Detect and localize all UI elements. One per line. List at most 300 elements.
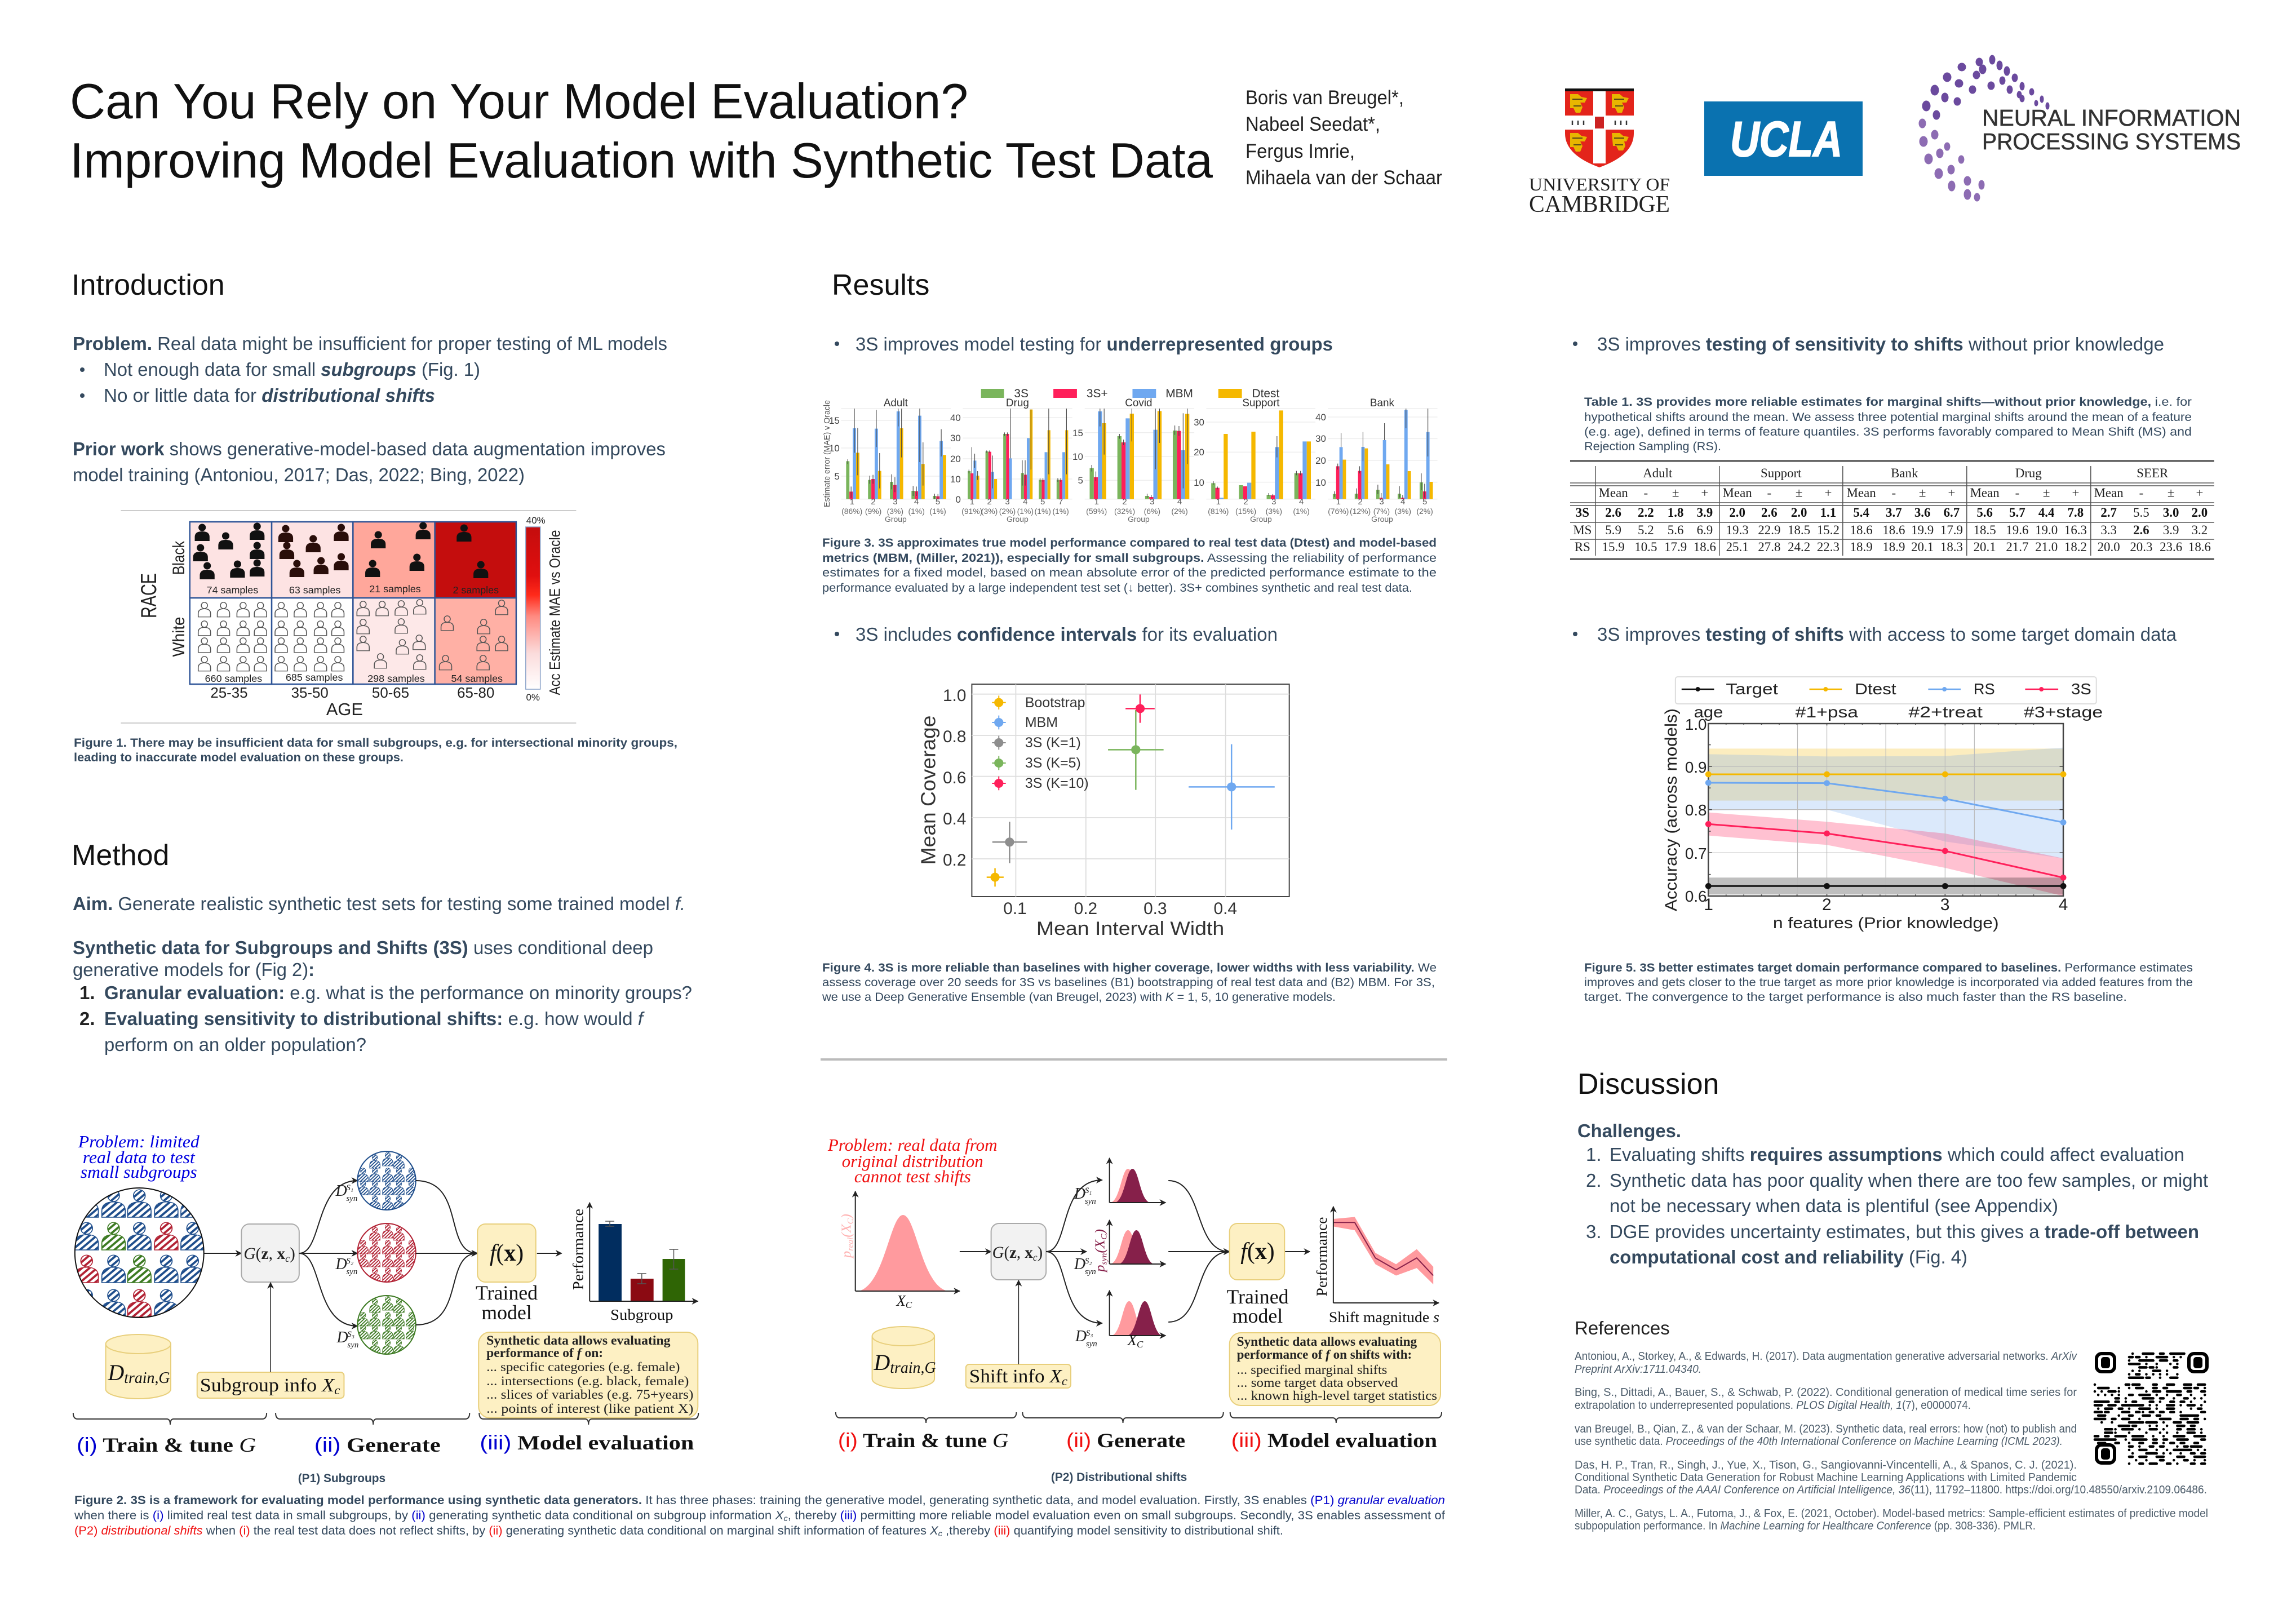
synthetic set labels: p xyxy=(1093,1265,1108,1272)
table header: Mean xyxy=(1970,486,2000,500)
axis ticks and titles xyxy=(917,686,1237,939)
chart: real distribution: real xyxy=(846,1238,856,1251)
point: Bootstrap xyxy=(987,868,1004,886)
phase braces xyxy=(73,1413,698,1425)
table header: + xyxy=(1824,486,1832,500)
caption: figure 2: ,thereby xyxy=(942,1524,991,1537)
table header: ± xyxy=(2168,486,2174,500)
icon: training data cylinder: D xyxy=(874,1350,890,1375)
x ticks: 3 xyxy=(1379,497,1384,507)
table row: RS: 21.0 xyxy=(2035,540,2058,554)
group shares: Group xyxy=(1007,515,1029,524)
sample count labels: 660 samples xyxy=(205,673,262,684)
text block: reference list: Preprint ArXiv:1711.04340. xyxy=(1575,1363,1701,1376)
text block: prior work: Prior work shows generative-model-based data augmentation improves xyxy=(73,438,666,459)
subgroup info box: c xyxy=(334,1383,340,1397)
table header: + xyxy=(2196,486,2203,500)
group shares: Group xyxy=(1250,515,1272,524)
chart legend: MBM xyxy=(1165,387,1193,400)
title: Improving Model Evaluation with Synthetic Test Data xyxy=(70,132,1213,188)
table row: 3S: 2.6 xyxy=(1605,505,1621,520)
group shares: (6%) xyxy=(1144,507,1160,516)
group shares: Group xyxy=(1128,515,1150,524)
phase labels: (ii) Generate xyxy=(314,1433,441,1456)
phase labels: (i) Train & tune G xyxy=(838,1429,1009,1452)
heading: Discussion: Discussion xyxy=(1577,1068,1719,1101)
caption: figure 3: estimates for a fixed model, based on mean absolute error of the predicted performance estimate to the xyxy=(822,566,1437,579)
axis labels: White xyxy=(170,617,188,657)
synthetic set labels: D xyxy=(335,1256,347,1273)
evaluation note box: performance of f on: xyxy=(486,1346,603,1360)
caption: figure 3: performance evaluated by a large independent test set (↓ better). 3S+ combines synthetic and real test data. xyxy=(822,582,1412,595)
chart legend: RS xyxy=(1974,680,1995,698)
line chart: performance vs shift magnitude: Performance xyxy=(1314,1217,1330,1297)
y ticks: 0 xyxy=(955,494,961,505)
chart: shift S2 xyxy=(1110,1220,1165,1264)
point: 3S K=5 xyxy=(1108,710,1164,790)
table header: Drug xyxy=(2015,466,2042,480)
chart legend: Target xyxy=(1726,680,1778,698)
y ticks: 30 xyxy=(1315,433,1326,444)
table header: Mean xyxy=(1847,486,1876,500)
problem note: Problem: real data from xyxy=(827,1135,998,1155)
plot area xyxy=(1705,724,2067,896)
text block: reference list: Antoniou, A., Storkey, A., & Edwards, H. (2017). Data augmentation generative adversarial networks. ArXiv xyxy=(1575,1350,2077,1363)
table row: MS: 19.0 xyxy=(2035,523,2058,537)
phase labels xyxy=(838,1429,1437,1452)
colour bar legend: 40% xyxy=(526,515,546,526)
table header: Support xyxy=(1761,466,1802,480)
y ticks: 10 xyxy=(1315,477,1326,488)
table row: 3S: 3.7 xyxy=(1886,505,1902,520)
problem note: cannot test shifts xyxy=(854,1167,971,1186)
title: Can You Rely on Your Model Evaluation? xyxy=(70,73,968,129)
icons: white subgroup people xyxy=(198,600,508,671)
table row: 3S: 3.0 xyxy=(2163,505,2179,520)
chart: real distribution: (X xyxy=(840,1223,854,1238)
arrow: real data to generator xyxy=(204,1253,241,1254)
bullet: underrepresented groups: 3S improves model testing for underrepresented groups xyxy=(856,334,1333,354)
axis ticks and titles: 0.9 xyxy=(1685,759,1707,776)
x ticks: 3 xyxy=(1271,497,1276,507)
caption: table 1: hypothetical shifts around the mean. We assess three potential marginal shifts around the mean of a feature xyxy=(1584,411,2192,424)
icons: black subgroup people xyxy=(193,522,488,579)
text block: challenges: DGE provides uncertainty estimates, but this gives a trade-off between xyxy=(1610,1221,2199,1242)
x ticks: 4 xyxy=(914,497,919,507)
icon: training data cylinder: train,G xyxy=(890,1359,936,1377)
group shares: Group xyxy=(885,515,907,524)
text block: 3S description: Evaluating sensitivity to distributional shifts: e.g. how would f xyxy=(104,1008,645,1029)
subplot titles: Drug xyxy=(1006,397,1029,409)
y ticks: 15 xyxy=(829,415,840,426)
table row: 3S: 5.7 xyxy=(2009,505,2025,520)
table row: MS: 3.2 xyxy=(2192,523,2208,537)
table row: MS: 19.9 xyxy=(1911,523,1934,537)
table row: 3S: 2.0 xyxy=(1791,505,1807,520)
point: 3S K=1 xyxy=(992,822,1027,863)
synthetic set labels: D xyxy=(1075,1328,1087,1345)
caption: table 1: Rejection Sampling (RS). xyxy=(1584,440,1721,453)
text block: 3S description: Granular evaluation: e.g. what is the performance on minority groups? xyxy=(104,982,692,1003)
feature labels: age xyxy=(1694,703,1723,721)
text block: challenges: Challenges. xyxy=(1577,1120,1681,1141)
synthetic set labels xyxy=(335,1182,358,1350)
group shares: (15%) xyxy=(1235,507,1256,516)
icon: QR code xyxy=(2095,1354,2207,1464)
bullet: confidence intervals: 3S includes confidence intervals for its evaluation xyxy=(856,624,1278,645)
evaluation note box: ... specific categories (e.g. female) xyxy=(486,1360,680,1374)
synthetic set labels xyxy=(1074,1185,1143,1350)
x ticks: 1 xyxy=(1216,497,1221,507)
caption: figure 1: Figure 1. There may be insufficient data for small subgroups, e.g. for intersectional minority groups, xyxy=(74,737,677,750)
x ticks: 4 xyxy=(1023,497,1027,507)
sample count labels: 685 samples xyxy=(286,672,343,683)
subplot titles: Bank xyxy=(1370,397,1395,409)
text block: reference list: subpopulation performance. In Machine Learning for Healthcare Conference (pp. 308-336). PMLR. xyxy=(1575,1520,2036,1532)
line chart: performance vs shift magnitude xyxy=(1314,1207,1439,1325)
x ticks: 1 xyxy=(1336,497,1341,507)
subgroup info box: Subgroup info X xyxy=(200,1375,334,1396)
x ticks: 5 xyxy=(1040,497,1045,507)
trained model box: model xyxy=(1233,1305,1283,1327)
caption: figure 2: c xyxy=(783,1514,788,1523)
heading: Method: Method xyxy=(72,839,169,872)
chart legend xyxy=(1676,677,2096,704)
feature labels xyxy=(1694,703,2103,721)
icon: circle of real people xyxy=(75,1188,205,1318)
group shares: (81%) xyxy=(1208,507,1229,516)
synthetic set labels: X xyxy=(1128,1332,1137,1349)
arrow: model to performance xyxy=(537,1253,561,1254)
generator box: ) xyxy=(1038,1243,1043,1262)
legend labels: 3S (K=5) xyxy=(1025,755,1081,771)
chart: real distribution: C xyxy=(906,1300,912,1310)
axis labels: 35-50 xyxy=(291,685,329,701)
table header: + xyxy=(1701,486,1708,500)
figure 3: bar charts by subgroup xyxy=(822,387,1438,524)
text block: aim: Aim. Generate realistic synthetic test sets for testing some trained model f. xyxy=(73,893,685,914)
table header: + xyxy=(2072,486,2079,500)
trained model box: f(x) xyxy=(1240,1239,1275,1265)
caption: table 1: (e.g. age), defined in terms of feature quantiles. 3S performs favorably compared to Mean Shift (MS) and xyxy=(1584,425,2192,438)
axis ticks and titles: 0.3 xyxy=(1143,899,1167,918)
logo: Neural Information Processing Systems: NEURAL INFORMATION xyxy=(1982,105,2241,131)
legend labels: Bootstrap xyxy=(1025,695,1085,711)
caption: figure 2: (P2) distributional shifts when (i) the real test data does not reflect shifts, by (ii) generating synthetic data conditional on marginal shift information of features X xyxy=(74,1524,938,1537)
icon: training data cylinder xyxy=(106,1334,171,1399)
table row: MS: 6.9 xyxy=(1697,523,1713,537)
synthetic set labels: S₃ xyxy=(1086,1329,1093,1338)
table row: MS: 5.2 xyxy=(1638,523,1654,537)
y ticks: 5 xyxy=(834,471,840,482)
axis labels: AGE xyxy=(326,699,363,719)
group shares: (2%) xyxy=(999,507,1016,516)
series: Target xyxy=(1705,883,2067,889)
text block: reference list: van Breugel, B., Qian, Z., & van der Schaar, M. (2023). Synthetic data, real errors: how (not) to publish and xyxy=(1575,1423,2077,1435)
table row: RS: 20.3 xyxy=(2130,540,2152,554)
group shares: (2%) xyxy=(1416,507,1433,516)
caption: figure 5 xyxy=(1584,961,2193,1004)
subplot titles: Support xyxy=(1242,397,1280,409)
table row: MS: 5.6 xyxy=(1668,523,1683,537)
y ticks: 5 xyxy=(1078,475,1083,486)
trained model box: Trained xyxy=(1226,1285,1289,1308)
x ticks: 2 xyxy=(1243,497,1248,507)
text block: reference list: extrapolation to underrepresented populations. PLOS Digital Health, 1(7), e0000074. xyxy=(1575,1399,1971,1412)
chart: shift S1 xyxy=(1110,1158,1165,1203)
text block: reference list: Bing, S., Dittadi, A., Bauer, S., & Schwab, P. (2022). Conditional generation of medical time series for xyxy=(1575,1386,2077,1399)
table row: 3S: 2.0 xyxy=(2192,505,2208,520)
x ticks: 5 xyxy=(936,497,940,507)
axis ticks and titles: 3 xyxy=(1940,895,1950,914)
phase labels: (i) Train & tune G xyxy=(77,1433,256,1456)
table row: 3S: 3.9 xyxy=(1697,505,1713,520)
synthetic set labels: (X xyxy=(1093,1239,1108,1253)
evaluation note box: ... points of interest (like patient X) xyxy=(486,1402,693,1416)
caption: figure 3: Figure 3. 3S approximates true model performance compared to real test data (Dtest) and model-based xyxy=(822,536,1437,549)
text block: reference list: Data. Proceedings of the AAAI Conference on Artificial Intelligence, 36(11), 11792–11800. https://doi.org/10.48550/arxiv.2109.06486. xyxy=(1575,1484,2207,1496)
legend labels: 3S (K=1) xyxy=(1025,735,1081,751)
caption: figure 2: Figure 2. 3S is a framework for evaluating model performance using synthetic data generators. It has three phases: training the generative model, generating synthetic data, and model evaluation. Firstly, 3S enables (P1) granular evaluation xyxy=(74,1494,1445,1507)
chart legend: Dtest xyxy=(1855,680,1896,698)
x ticks: 5 xyxy=(1422,497,1427,507)
table header: Bank xyxy=(1891,466,1918,480)
figure 5: accuracy vs features line chart xyxy=(1662,677,2103,932)
synthetic set labels: D xyxy=(1074,1256,1085,1273)
caption: figure 4 xyxy=(822,961,1437,1004)
axis ticks and titles: 4 xyxy=(2059,895,2068,914)
feature labels: #2+treat xyxy=(1909,703,1983,721)
synthetic set labels: ) xyxy=(1093,1229,1108,1235)
text block: prior work xyxy=(73,438,666,485)
table row: MS: 3.3 xyxy=(2100,523,2117,537)
chart: real distribution: ) xyxy=(840,1214,854,1220)
text block: problem statement: Not enough data for small subgroups (Fig. 1) xyxy=(104,359,480,380)
sample count labels: 63 samples xyxy=(289,584,340,596)
problem note: small subgroups xyxy=(81,1162,197,1182)
caption: figure 3 xyxy=(822,536,1437,595)
shift info box: c xyxy=(1062,1374,1067,1388)
table row: MS: 18.6 xyxy=(1882,523,1905,537)
table row: 3S: 2.7 xyxy=(2100,505,2117,520)
legend markers xyxy=(992,695,1006,790)
generator box: G(z, x xyxy=(992,1243,1033,1262)
table header: ± xyxy=(1919,486,1926,500)
evaluation note box: Synthetic data allows evaluating xyxy=(486,1333,671,1347)
y ticks xyxy=(829,412,1326,505)
y ticks: 20 xyxy=(1194,447,1204,458)
table row: 3S: 5.4 xyxy=(1853,505,1869,520)
axis ticks and titles: 0.6 xyxy=(943,769,966,787)
group shares: (91%) xyxy=(961,507,982,516)
arrows: synthetic sets to model xyxy=(416,1181,477,1325)
shift info box: Shift info X xyxy=(969,1366,1061,1387)
group shares: (1%) xyxy=(1034,507,1051,516)
caption: figure 5: target. The convergence to the target performance is also much faster than the RS baseline. xyxy=(1584,991,2127,1004)
text block: challenges: 1. xyxy=(1586,1144,1602,1165)
sample count labels: 21 samples xyxy=(369,583,421,595)
text block: 3S description: generative models for (Fig 2): xyxy=(73,959,314,980)
chart legend: 3S xyxy=(1014,387,1029,400)
table header: - xyxy=(2015,486,2019,500)
table 1: marginal shift results xyxy=(1570,461,2214,559)
synthetic set labels: S₁ xyxy=(346,1183,353,1192)
point: MBM xyxy=(1189,744,1275,830)
phase labels xyxy=(77,1431,694,1456)
table row: 3S: 5.6 xyxy=(1976,505,1993,520)
caption: figure 4: we use a Deep Generative Ensemble (van Breugel, 2023) with K = 1, 5, 10 generative models. xyxy=(822,991,1336,1004)
evaluation note box: ... some target data observed xyxy=(1237,1376,1398,1390)
authors: Fergus Imrie, xyxy=(1245,140,1355,162)
arrows: generator to shifted distributions xyxy=(1046,1180,1102,1323)
evaluation note box: Synthetic data allows evaluating xyxy=(1237,1334,1417,1349)
table row: RS: 20.0 xyxy=(2098,540,2120,554)
table header: - xyxy=(1892,486,1896,500)
text block: challenges: not be necessary when data is plentiful (see Appendix) xyxy=(1610,1195,2058,1216)
synthetic set labels: C xyxy=(1100,1233,1109,1240)
table row: RS: 10.5 xyxy=(1634,540,1657,554)
table row: MS: 3.9 xyxy=(2163,523,2179,537)
chart: real distribution: p xyxy=(840,1251,854,1258)
sample count labels: 74 samples xyxy=(207,584,258,596)
chart legend xyxy=(981,387,1279,400)
caption: table 1: Table 1. 3S provides more reliable estimates for marginal shifts—without prior knowledge, i.e. for xyxy=(1584,396,2192,409)
synthetic set labels: syn xyxy=(346,1267,357,1276)
synthetic set labels: D xyxy=(335,1182,347,1200)
group shares: (2%) xyxy=(1171,507,1188,516)
chart legend: 3S xyxy=(2071,680,2091,698)
evaluation note box: ... known high-level target statistics xyxy=(1237,1389,1437,1403)
table row: 3S xyxy=(1576,505,2208,520)
group shares: (76%) xyxy=(1328,507,1349,516)
caption: figure 2 xyxy=(74,1494,1445,1538)
caption: figure 2: c xyxy=(938,1529,942,1538)
icon: training data cylinder xyxy=(872,1327,936,1389)
table header: - xyxy=(1767,486,1771,500)
table row: MS: 22.9 xyxy=(1758,523,1780,537)
table row: MS: 17.9 xyxy=(1940,523,1963,537)
x ticks: 2 xyxy=(1358,497,1363,507)
table row: 3S: 2.6 xyxy=(1761,505,1778,520)
authors: Boris van Breugel*, xyxy=(1245,87,1404,109)
axis labels: Black xyxy=(170,541,188,575)
authors xyxy=(1245,87,1442,189)
table row: MS: MS xyxy=(1573,523,1592,537)
synthetic set labels: D xyxy=(1074,1185,1085,1203)
chart: shift S3 xyxy=(1110,1291,1165,1336)
authors: Nabeel Seedat*, xyxy=(1245,113,1380,135)
heatmap cells xyxy=(190,522,516,684)
y ticks: 10 xyxy=(829,443,840,454)
caption: figure 2: , thereby xyxy=(788,1509,837,1522)
table row: RS: 17.9 xyxy=(1664,540,1687,554)
sample count labels xyxy=(205,583,503,684)
arrows: distributions to model xyxy=(1168,1181,1230,1322)
chart legend: Dtest xyxy=(1252,387,1279,400)
evaluation note box: performance of f on shifts with: xyxy=(1237,1347,1412,1362)
table row: RS: 22.3 xyxy=(1817,540,1840,554)
heading: Results: Results xyxy=(832,269,929,301)
table row: MS: 19.6 xyxy=(2006,523,2028,537)
table row: 3S: 3.6 xyxy=(1914,505,1930,520)
problem note: real data to test xyxy=(83,1147,196,1167)
panel label P1: (P1) Subgroups xyxy=(298,1472,385,1485)
authors: Mihaela van der Schaar xyxy=(1245,167,1442,189)
bars xyxy=(841,409,1438,499)
evaluation note box xyxy=(478,1332,698,1418)
icon: synthetic subgroup S1 xyxy=(357,1151,416,1210)
caption: figure 4: Figure 4. 3S is more reliable than baselines with higher coverage, lower widths with less variability. We xyxy=(822,961,1437,974)
sample count labels: 298 samples xyxy=(367,673,425,684)
text block: problem statement: No or little data for distributional shifts xyxy=(104,385,435,406)
caption: figure 5: improves and gets closer to the true target as more prior knowledge is incorporated via added features from the xyxy=(1584,976,2193,989)
panel label P2: (P2) Distributional shifts xyxy=(1051,1471,1187,1484)
synthetic set labels: syn xyxy=(1086,1340,1097,1349)
colour bar legend: 0% xyxy=(526,692,540,703)
table header: ± xyxy=(1796,486,1802,500)
table header: - xyxy=(2139,486,2143,500)
axis ticks and titles: 1 xyxy=(1704,895,1713,914)
synthetic set labels: syn xyxy=(1100,1253,1109,1265)
line chart: performance vs shift magnitude: Shift magnitude s xyxy=(1329,1309,1439,1325)
text block: problem statement xyxy=(73,333,667,406)
title xyxy=(70,73,1213,188)
chart: real distribution: X xyxy=(896,1292,906,1309)
table row: RS: 18.6 xyxy=(2188,540,2211,554)
y ticks: 40 xyxy=(950,413,961,423)
axis ticks and titles: Mean Coverage xyxy=(917,716,940,864)
phase braces xyxy=(836,1412,1442,1423)
text block: challenges: Evaluating shifts requires assumptions which could affect evaluation xyxy=(1610,1144,2184,1165)
table row: MS: 15.2 xyxy=(1817,523,1840,537)
group shares: (1%) xyxy=(1052,507,1069,516)
y ticks: 30 xyxy=(1194,417,1204,428)
y ticks: 40 xyxy=(1315,412,1326,423)
table row: RS: 18.6 xyxy=(1694,540,1716,554)
group shares: (1%) xyxy=(1017,507,1034,516)
table row: MS xyxy=(1573,523,2208,537)
text block: 3S description: 1. xyxy=(79,982,95,1003)
x ticks: 1 xyxy=(1094,497,1099,507)
table row: 3S: 4.4 xyxy=(2038,505,2055,520)
table row: RS: 21.7 xyxy=(2006,540,2028,554)
icon: synthetic subgroup S2 xyxy=(357,1223,416,1282)
generator box xyxy=(241,1224,299,1282)
chart legend: 3S+ xyxy=(1087,387,1108,400)
text block: challenges xyxy=(1577,1120,2208,1267)
y ticks: 15 xyxy=(1072,428,1083,438)
table header xyxy=(1599,466,2203,500)
legend labels: MBM xyxy=(1025,715,1058,730)
group shares: (32%) xyxy=(1114,507,1135,516)
y ticks: 20 xyxy=(1315,455,1326,466)
figure 2 panel P2: distributional shifts xyxy=(827,1135,1442,1484)
synthetic set labels: syn xyxy=(346,1194,357,1203)
trained model box: Trained xyxy=(476,1281,538,1304)
group shares: (3%) xyxy=(887,507,903,516)
x ticks: 2 xyxy=(987,497,992,507)
evaluation note box: ... specified marginal shifts xyxy=(1237,1363,1388,1377)
table row: 3S: 7.8 xyxy=(2068,505,2084,520)
heading: Introduction: Introduction xyxy=(72,269,225,301)
table row: MS: 5.9 xyxy=(1605,523,1621,537)
axis ticks and titles: 1.0 xyxy=(943,686,966,705)
feature labels: #1+psa xyxy=(1796,703,1859,721)
text block: challenges: computational cost and reliability (Fig. 4) xyxy=(1610,1247,1967,1267)
text block: 3S description: perform on an older population? xyxy=(104,1034,366,1055)
legend labels: 3S (K=10) xyxy=(1025,775,1089,791)
arrows: generator to synthetic sets xyxy=(299,1181,357,1326)
